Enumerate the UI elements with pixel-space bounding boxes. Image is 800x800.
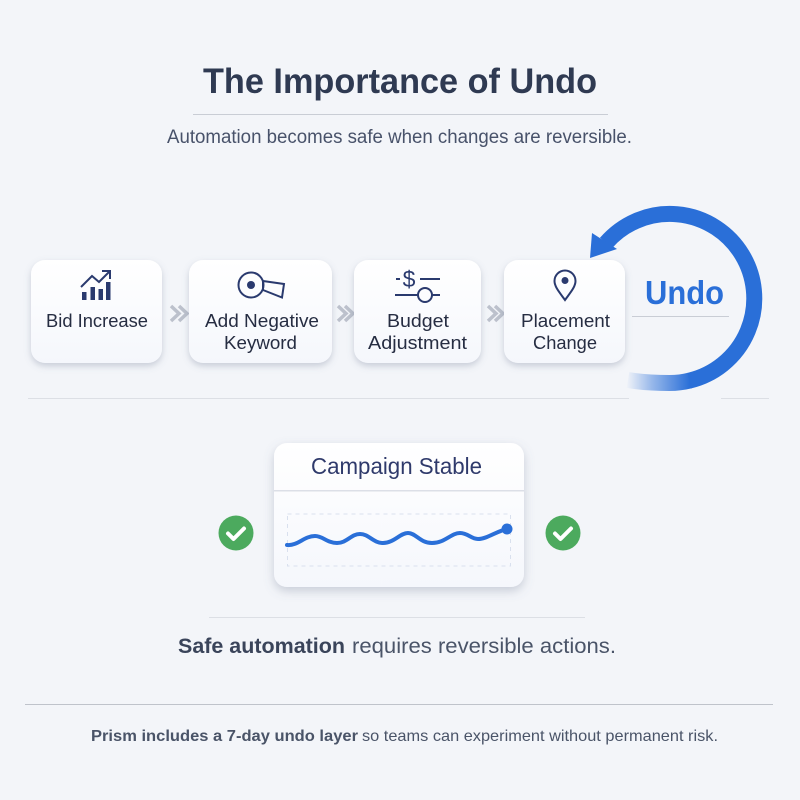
takeaway text: Safe automation: [178, 635, 345, 658]
panel heading: Campaign Stable: [311, 453, 482, 479]
icon: left check: [218, 516, 254, 550]
step card: Placement Change: [504, 260, 625, 363]
step card: Placement Change: Change: [533, 332, 597, 353]
step card: Add Negative Keyword: [189, 260, 332, 363]
step card: Budget Adjustment: Adjustment: [368, 332, 467, 353]
label: Budget: [387, 310, 449, 331]
takeaway text: requires reversible actions.: [352, 635, 616, 658]
icon: map pin: [554, 270, 576, 300]
step card: Budget Adjustment: [354, 260, 481, 363]
label: Placement: [521, 310, 610, 331]
step card: Add Negative Keyword: Keyword: [224, 332, 297, 353]
panel: campaign stable: [274, 443, 524, 587]
takeaway text: [178, 635, 616, 658]
icon: rising bar chart: [81, 271, 110, 300]
label: Add Negative: [205, 310, 319, 331]
icon: dollar slider: $: [403, 266, 416, 292]
step card: Bid Increase: [31, 260, 162, 363]
icon: target key: [238, 272, 284, 298]
line chart: [287, 514, 512, 566]
undo arrow: [590, 214, 754, 383]
arrow: chevrons 1: [171, 306, 187, 321]
arrow: chevrons 2: [338, 306, 353, 321]
footer note: so teams can experiment without permanent risk.: [362, 728, 718, 745]
undo label: Undo: [645, 274, 724, 311]
footer note: Prism includes a 7-day undo layer: [91, 728, 358, 745]
arrow: chevrons 3: [488, 306, 503, 321]
icon: right check: [546, 516, 580, 550]
footer note: [91, 728, 718, 745]
subtitle: Automation becomes safe when changes are reversible.: [167, 127, 632, 148]
title: The Importance of Undo: [203, 62, 597, 101]
label: Bid Increase: [46, 310, 148, 331]
